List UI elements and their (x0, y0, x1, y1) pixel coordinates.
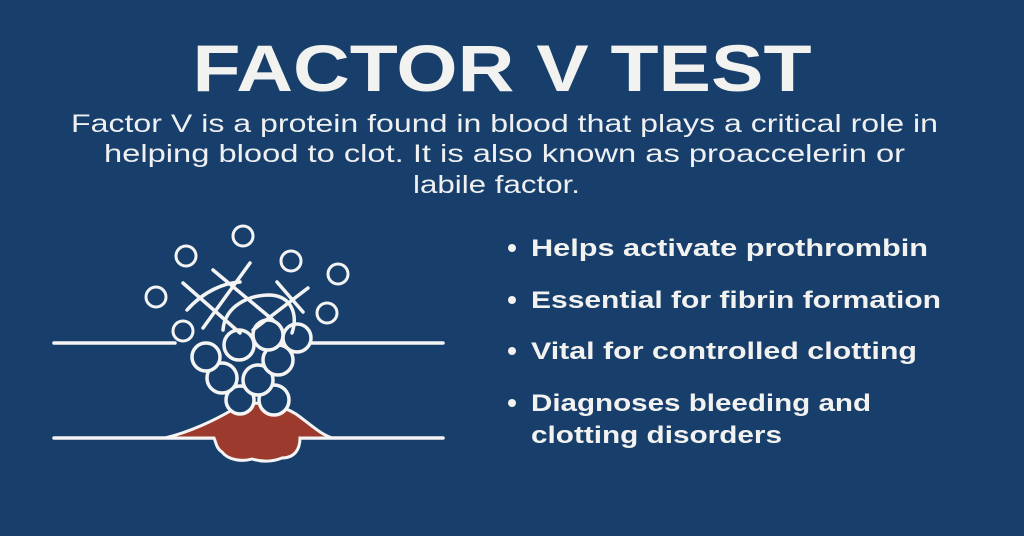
bullet 4: clotting disorders (531, 422, 782, 449)
bullet 4: Diagnoses bleeding and (531, 390, 871, 417)
fibrin mesh (183, 263, 308, 333)
platelets cluster (192, 320, 311, 415)
floating platelets (146, 226, 348, 341)
bullet 4 (508, 390, 871, 449)
description text: Factor V is a protein found in blood that plays a critical role in (71, 110, 938, 138)
blood pool (165, 403, 332, 461)
bullet 2: Essential for fibrin formation (531, 287, 941, 314)
description text (71, 110, 938, 199)
bullet list (508, 235, 941, 449)
title: FACTOR V TEST (192, 31, 812, 105)
bullet 1: Helps activate prothrombin (531, 235, 928, 262)
illustration: blood clot in vessel (54, 226, 443, 461)
bullet 3: Vital for controlled clotting (531, 338, 917, 365)
description text: labile factor. (413, 171, 580, 199)
description text: helping blood to clot. It is also known as proaccelerin or (104, 140, 905, 168)
vessel walls (54, 343, 443, 438)
